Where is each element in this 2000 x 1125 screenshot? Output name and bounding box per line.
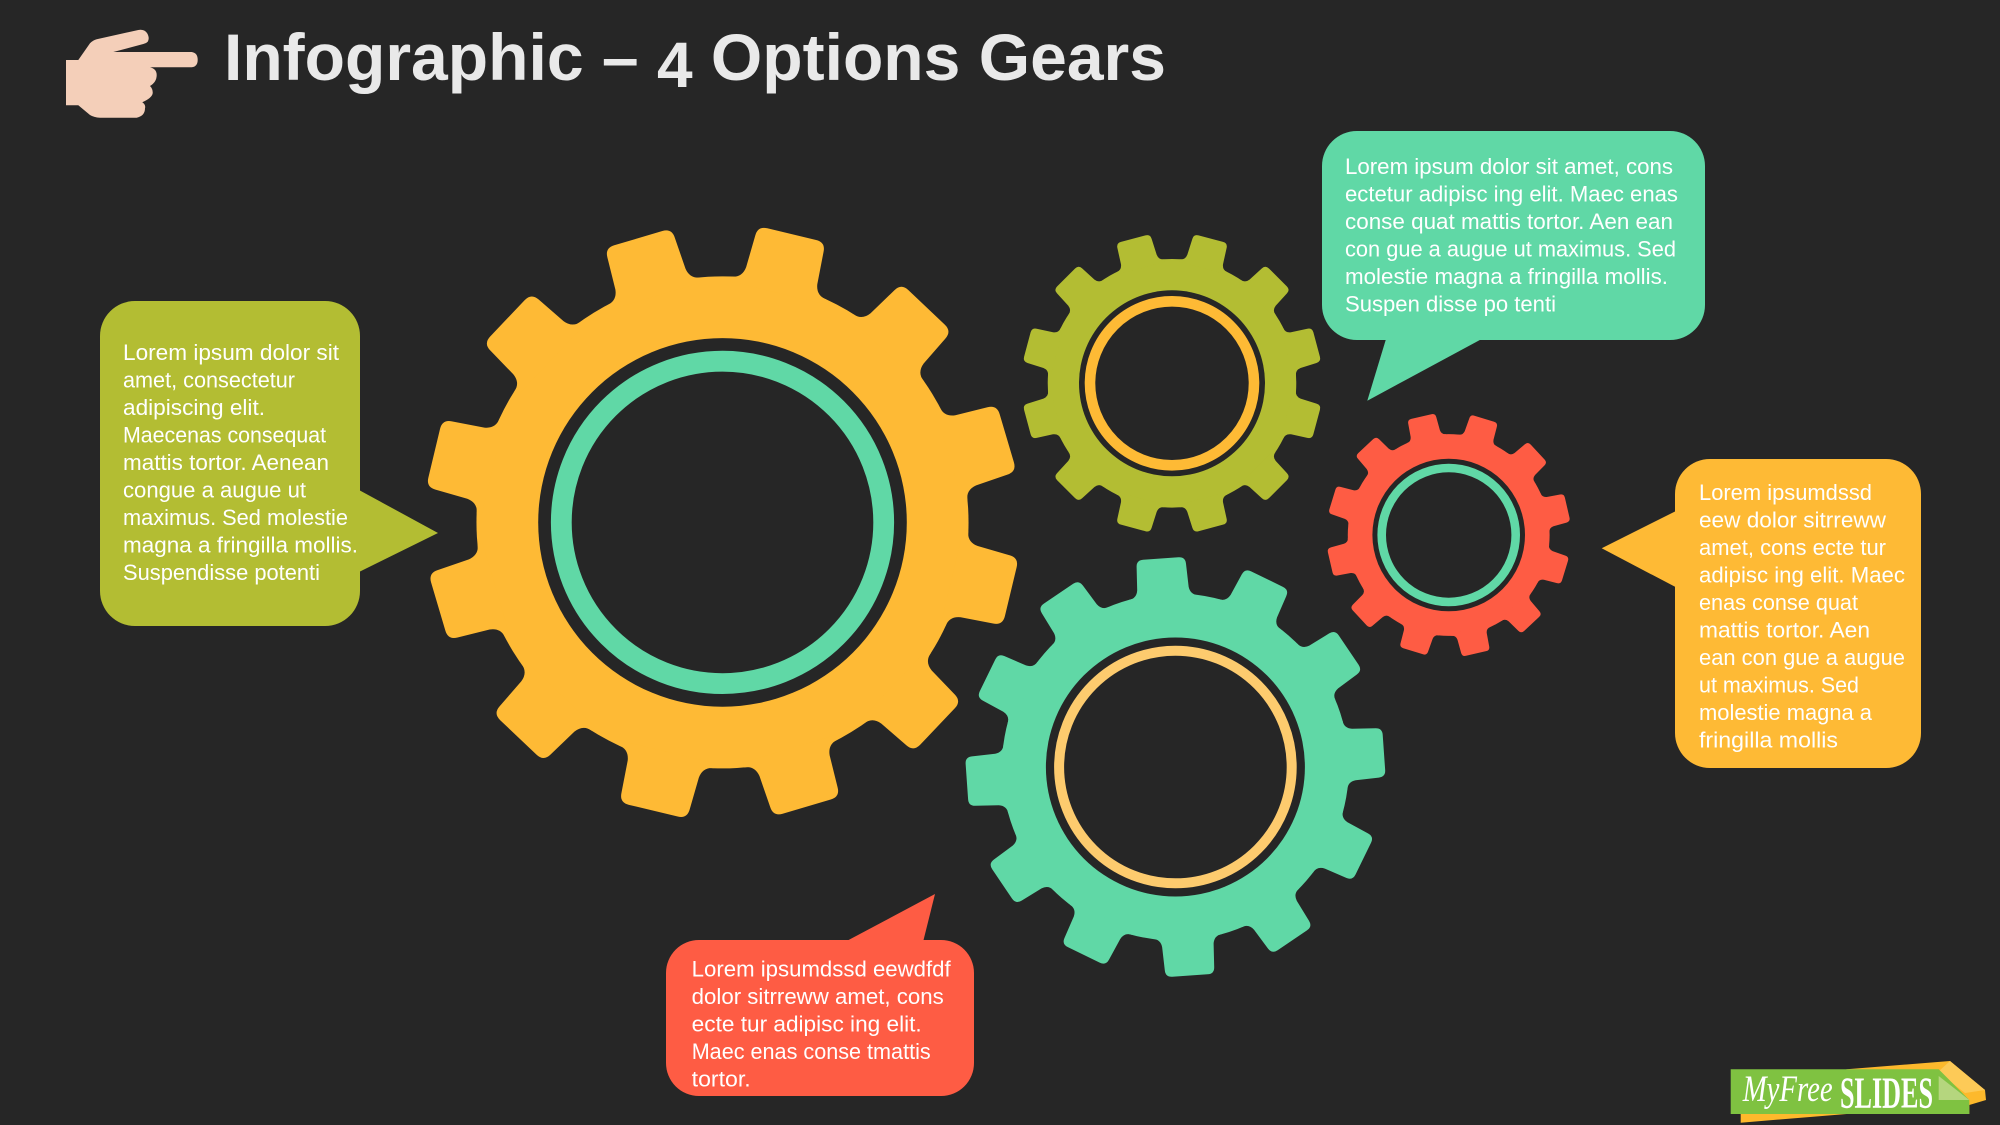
callout: orange right: Lorem ipsumdssd	[1699, 480, 1872, 505]
callout: orange right: ean con gue a augue	[1699, 645, 1905, 670]
callout: orange right: ut maximus. Sed	[1699, 672, 1859, 698]
title: 4	[657, 29, 693, 101]
callout: orange right: mattis tortor. Aen	[1699, 618, 1870, 642]
title: Infographic –	[224, 20, 638, 94]
callout: red bottom: ecte tur adipisc ing elit.	[692, 1012, 922, 1036]
callout: orange right: fringilla mollis	[1699, 728, 1838, 752]
callout: orange right: molestie magna a	[1699, 700, 1873, 725]
callout: olive left	[100, 301, 438, 626]
gear: large orange	[365, 165, 1080, 880]
gear: red	[1297, 383, 1601, 687]
callout: orange right: adipisc ing elit. Maec	[1699, 562, 1905, 588]
logo: MyFree Slides: SLIDES	[1840, 1069, 1933, 1118]
callout: green top: Lorem ipsum dolor sit amet, cons	[1345, 154, 1673, 179]
callout: green top: ectetur adipisc ing elit. Maec enas	[1345, 182, 1678, 206]
callout: orange right: eew dolor sitrreww	[1699, 508, 1886, 532]
callout: red bottom: Lorem ipsumdssd eewdfdf	[692, 957, 952, 982]
gear: olive	[989, 200, 1355, 567]
callout: olive left: Maecenas consequat	[123, 422, 326, 448]
gear: green	[952, 544, 1399, 990]
callout: green top: molestie magna a fringilla mollis.	[1345, 264, 1668, 289]
callout: orange right: amet, cons ecte tur	[1699, 535, 1886, 560]
callout: orange right: enas conse quat	[1699, 590, 1858, 615]
callout: red bottom: Maec enas conse tmattis	[692, 1039, 931, 1064]
callout: olive left: magna a fringilla mollis.	[123, 532, 358, 558]
callout: orange right	[1602, 459, 1921, 768]
callout: olive left: Suspendisse potenti	[123, 560, 320, 585]
callout: olive left: amet, consectetur	[123, 368, 295, 392]
callout: olive left: mattis tortor. Aenean	[123, 450, 329, 475]
callout: red bottom: tortor.	[692, 1067, 751, 1092]
logo: MyFree Slides	[1731, 1061, 1986, 1123]
logo: MyFree Slides: MyFree	[1742, 1069, 1833, 1110]
callout: olive left: maximus. Sed molestie	[123, 505, 348, 530]
callout: green top: con gue a augue ut maximus. Sed	[1345, 236, 1676, 262]
callout: green top: Suspen disse po tenti	[1345, 292, 1556, 316]
callout: olive left: Lorem ipsum dolor sit	[123, 340, 339, 365]
title: Options Gears	[693, 20, 1166, 94]
callout: red bottom	[666, 894, 974, 1096]
callout: green top: conse quat mattis tortor. Aen ean	[1345, 209, 1673, 234]
callout: olive left: adipiscing elit.	[123, 395, 265, 420]
callout: red bottom: dolor sitrreww amet, cons	[692, 984, 944, 1009]
callout: olive left: congue a augue ut	[123, 478, 306, 502]
callout: green top	[1322, 131, 1705, 401]
icon: pointing hand	[66, 30, 198, 118]
